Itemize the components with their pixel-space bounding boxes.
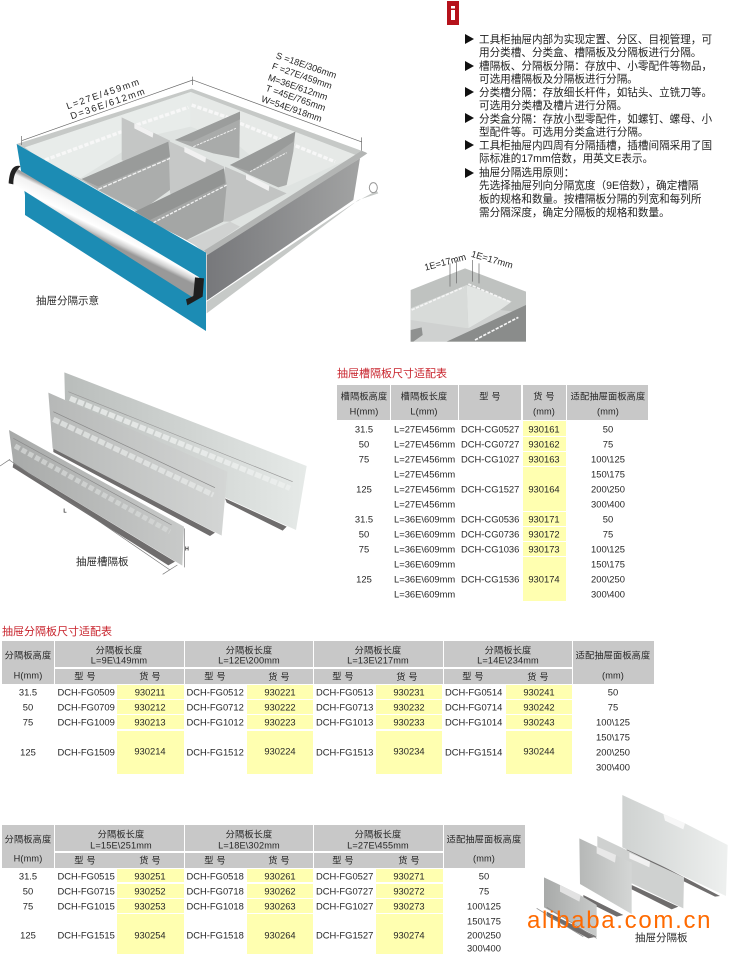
table 2 rows: DCH-FG1512 [186, 746, 244, 758]
table 3 header: 分隔板长度 [98, 828, 144, 840]
aluminium handle [9, 166, 204, 305]
bullet text: 可选用槽隔板及分隔板进行分隔。 [479, 72, 638, 86]
table 2 rows: 150\175 [596, 732, 630, 742]
dimension labels: L=27E/459mm [65, 76, 142, 111]
table 2 rows: 930232 [393, 702, 425, 712]
table 3 rows: 930272 [393, 886, 425, 896]
table 2 rows: 100\125 [596, 716, 630, 728]
table 3 rows: 930263 [264, 900, 296, 912]
table 1 header: 槽隔板高度 [341, 390, 387, 402]
table 2 rows: 930231 [393, 686, 425, 698]
table 2 rows: DCH-FG0713 [316, 702, 373, 712]
table 1 rows: 930174 [528, 574, 560, 584]
table 1 rows: 31.5 [355, 424, 373, 434]
small divider [537, 877, 623, 938]
table 1 rows: 100\125 [591, 454, 625, 464]
table 3 rows: 150\175 [467, 916, 501, 926]
table 2 rows: 300\400 [596, 762, 630, 772]
back partition [64, 372, 307, 531]
table 2 rows: DCH-FG1509 [58, 746, 115, 758]
bullet text: 工具柜抽屉内四周有分隔插槽，插槽间隔采用了国 [479, 139, 712, 152]
table 1 rows: 200\250 [591, 574, 625, 584]
table 2 rows: 930212 [134, 702, 166, 712]
table 3 header: 货 号 [398, 854, 420, 866]
table 3 header: L=15E\251mm [90, 840, 152, 850]
table 2 header: H(mm) [14, 670, 42, 680]
table 1 rows: 300\400 [591, 588, 625, 600]
table 3 header: L=18E\302mm [218, 840, 280, 850]
large divider [622, 795, 728, 897]
table 2 rows: 930233 [393, 716, 425, 728]
table 1 rows: L=36E\609mm [394, 544, 455, 554]
table 3 rows: 930273 [393, 900, 425, 912]
table 3 rows: 50 [23, 886, 33, 896]
table 2 rows: 125 [20, 746, 36, 758]
table 2 rows: DCH-FG1513 [316, 746, 373, 758]
table 1 rows: 50 [603, 514, 613, 524]
watermark: alibaba.com.cn [527, 907, 712, 934]
table 1 rows: DCH-CG0527 [461, 424, 519, 434]
table 2 rows: 50 [23, 702, 33, 712]
table 3 rows [19, 870, 501, 954]
drawer illustration [9, 50, 378, 331]
table 2 rows: DCH-FG0512 [186, 686, 244, 698]
table 2 rows: 930214 [134, 746, 166, 756]
table 3 header: (mm) [473, 854, 495, 864]
dimension labels: D=36E/612mm [69, 86, 147, 121]
table 1 rows: 75 [359, 544, 369, 554]
table 1 header: 槽隔板长度 [401, 390, 447, 402]
table 2 rows: 930234 [393, 746, 425, 756]
table 2 rows: DCH-FG0513 [316, 686, 373, 698]
table 3 rows: DCH-FG0518 [186, 870, 244, 882]
detail: 1E slot spacing: 1E=17mm [470, 249, 514, 270]
table 1 rows: 50 [359, 438, 369, 450]
dimension labels: W=54E/918mm [260, 94, 324, 124]
table 3 rows: 930264 [264, 930, 296, 940]
table 3 rows: DCH-FG1015 [58, 900, 115, 912]
dimension lines [22, 77, 362, 151]
caption: slotted partition: 抽屉槽隔板 [76, 555, 129, 568]
table 3 rows: 930271 [393, 870, 425, 882]
table 1 rows: 150\175 [591, 468, 625, 480]
table 2 header: (mm) [602, 670, 624, 680]
table 1 rows: 930173 [528, 544, 560, 554]
table 2 rows: DCH-FG1012 [186, 716, 244, 728]
table 3 rows: DCH-FG1518 [186, 930, 244, 940]
table 3 rows: DCH-FG1027 [316, 900, 373, 912]
table 2 header: 适配抽屉面板高度 [576, 650, 650, 660]
drawer interior [17, 89, 367, 252]
table 3 rows: DCH-FG1515 [58, 930, 115, 940]
L and H labels: L [63, 509, 67, 515]
table 1 rows [355, 424, 625, 600]
table 2 header: L=13E\217mm [347, 656, 409, 666]
table 1 rows: L=27E\456mm [394, 454, 455, 464]
table 1 rows: 75 [359, 454, 369, 464]
dimension labels: M=36E/612mm [267, 72, 329, 102]
illustration: dividers [537, 795, 728, 938]
middle partition [48, 393, 227, 536]
table 3 rows: 930254 [134, 930, 166, 940]
bullet text: 工具柜抽屉内部为实现定置、分区、目视管理，可 [479, 33, 712, 46]
table 2 header: 分隔板长度 [485, 644, 531, 656]
table 3 rows: 50 [479, 870, 489, 882]
dimension lines [0, 459, 184, 574]
table 1 rows: 50 [603, 424, 613, 434]
table 1 rows: 50 [359, 528, 369, 540]
table 3 rows: 75 [479, 886, 489, 896]
table 1 rows: 930161 [528, 424, 560, 434]
table 1 rows: DCH-CG1527 [461, 484, 519, 494]
table 1 rows: 100\125 [591, 544, 625, 554]
table 2 header: 型 号 [332, 672, 354, 682]
caption: drawer: 抽屉分隔示意 [36, 294, 99, 307]
table 3 rows: 930252 [134, 886, 166, 896]
front partition [9, 430, 184, 566]
table 3 rows: 200\250 [467, 930, 501, 940]
dimension labels [65, 50, 338, 124]
bullet text: 槽隔板、分隔板分隔：存放中、小零配件等物品， [479, 60, 712, 72]
table 2 rows: DCH-FG0712 [186, 702, 244, 712]
dividers [82, 112, 295, 252]
table 2 rows [19, 686, 630, 772]
table 2 rows: 50 [608, 686, 618, 698]
bullet text: 型配件等。可选用分类盒进行分隔。 [479, 126, 648, 138]
table 3 rows: 930251 [134, 870, 166, 882]
table 2 header: L=14E\234mm [477, 656, 539, 666]
bullet text: 分类槽分隔：存放细长杆件，如钻头、立铣刀等。 [479, 86, 712, 99]
table 3 header: 分隔板长度 [226, 828, 272, 840]
table 1 header: 货 号 [533, 390, 555, 402]
table 1 header: H(mm) [350, 406, 378, 416]
dimension labels: T =45E/765mm [264, 83, 327, 113]
bullet text: 用分类槽、分类盒、槽隔板及分隔板进行分隔。 [479, 46, 701, 59]
table 1 rows: 150\175 [591, 558, 625, 570]
table 1 rows: 930163 [528, 454, 560, 464]
table 1 rows: L=36E\609mm [394, 528, 455, 540]
table 3 header: 适配抽屉面板高度 [447, 834, 521, 844]
table 2 highlighted cells [117, 685, 572, 774]
table 1 rows: 930172 [528, 528, 560, 540]
caption: divider: 抽屉分隔板 [635, 931, 688, 944]
bullet markers [465, 34, 474, 178]
bullet text [479, 33, 712, 219]
table 2 rows: DCH-FG0509 [58, 686, 115, 698]
bullet text: 板的规格和数量。按槽隔板分隔的列宽和每列所 [479, 192, 702, 206]
table 3 header: H(mm) [14, 854, 42, 864]
table 1 header: 适配抽屉面板高度 [571, 390, 645, 402]
table 1 rows: L=36E\609mm [394, 574, 455, 584]
table 1 highlighted cells [523, 421, 566, 601]
detail: 1E slot spacing: 1E=17mm [423, 252, 467, 273]
table 1 header: (mm) [597, 406, 619, 416]
table 1 rows: DCH-CG0727 [461, 438, 519, 450]
table 2 rows: 930223 [264, 716, 296, 728]
table 1 rows: 125 [356, 574, 372, 584]
table 3 header: 型 号 [74, 856, 96, 866]
table 3 rows: 100\125 [467, 900, 501, 912]
table 2 header: 分隔板长度 [226, 644, 272, 656]
table 2 header: L=9E\149mm [91, 656, 147, 666]
L and H labels: H [185, 546, 189, 552]
detail: 1E slot spacing [411, 249, 526, 342]
table 2: divider sizes [2, 641, 654, 774]
table 1 rows: L=36E\609mm [394, 588, 455, 600]
table 2 header: 型 号 [74, 672, 96, 682]
table 1 rows: 75 [603, 528, 613, 540]
bullet text: 分类盒分隔：存放小型零配件，如螺钉、螺母、小 [479, 112, 712, 126]
table 2 rows: DCH-FG1009 [58, 716, 115, 728]
table 1 rows: L=36E\609mm [394, 514, 455, 524]
bullet text: 可选用分类槽及槽片进行分隔。 [479, 99, 627, 112]
table 1 header: 型 号 [479, 392, 501, 402]
table 1 rows: DCH-CG1036 [461, 544, 519, 554]
table 2 rows: 930242 [523, 702, 555, 712]
table 3 rows: DCH-FG0515 [58, 870, 115, 882]
bullet text: 抽屉分隔选用原则： [479, 166, 574, 179]
table 2 rows: 930244 [523, 746, 555, 756]
table 2 header: 型 号 [462, 672, 484, 682]
table 3 rows: DCH-FG0527 [316, 870, 373, 882]
table 3 rows: DCH-FG1527 [316, 930, 373, 940]
table 1 rows: DCH-CG1027 [461, 454, 519, 464]
table 2 header: 分隔板高度 [5, 650, 51, 660]
table 2 rows: 930224 [264, 746, 296, 756]
drawer right side and rail [204, 151, 378, 313]
table 2 rows: 930222 [264, 702, 296, 712]
table 2 rows: DCH-FG0709 [58, 702, 115, 712]
table 3 header: 货 号 [139, 854, 161, 866]
table 1 rows: 930164 [528, 484, 560, 494]
table 3 rows: 930274 [393, 930, 425, 940]
icon: info [447, 1, 459, 25]
dimension labels: S =18E/306mm [275, 50, 338, 81]
table 3 header: 分隔板高度 [5, 834, 51, 844]
table 2 title: 抽屉分隔板尺寸适配表 [2, 624, 112, 638]
table 2 header: 分隔板长度 [96, 644, 142, 656]
table 1 rows: L=36E\609mm [394, 558, 455, 570]
table 1 rows: 930171 [528, 514, 560, 524]
table 2 rows: 930211 [135, 686, 165, 698]
table 1 rows: 300\400 [591, 498, 625, 510]
table 2 rows: 200\250 [596, 746, 630, 758]
illustration: slotted partitions [0, 372, 307, 574]
L and H labels [63, 509, 189, 552]
table 3 rows: 125 [20, 930, 36, 940]
table 2 header: 货 号 [268, 671, 290, 682]
bullet text: 需分隔深度，确定分隔板的规格和数量。 [479, 206, 670, 219]
table 3 header: 货 号 [268, 854, 290, 866]
table 2 header [2, 641, 654, 684]
table 1 rows: 200\250 [591, 484, 625, 494]
table 2 rows: DCH-FG1514 [445, 746, 502, 758]
table 3 header: 型 号 [332, 856, 354, 866]
table 1 rows: 930162 [528, 438, 560, 450]
medium divider [579, 836, 684, 914]
table 1 rows: DCH-CG1536 [461, 574, 519, 584]
table 1 rows: DCH-CG0736 [461, 528, 519, 540]
table 2 rows: DCH-FG1013 [316, 716, 373, 728]
table 3 header: L=27E\455mm [347, 840, 409, 850]
table 1 rows: L=27E\456mm [394, 484, 455, 494]
table 2 header: L=12E\200mm [218, 656, 280, 666]
bullet list [465, 33, 712, 219]
table 3: divider sizes continued [2, 825, 525, 954]
table 2 rows: 930221 [264, 686, 296, 698]
table 1 title: 抽屉槽隔板尺寸适配表 [337, 366, 447, 380]
table 3 rows: DCH-FG0727 [316, 886, 373, 896]
blue drawer front [17, 144, 206, 331]
table 3 header: 分隔板长度 [355, 828, 401, 840]
table 3 rows: 930253 [134, 900, 166, 912]
table 1 rows: 31.5 [355, 514, 373, 524]
table 2 header: 货 号 [527, 671, 549, 682]
table 1 rows: 125 [356, 484, 372, 494]
table 3 highlighted cells [117, 869, 443, 954]
table 1 rows: DCH-CG0536 [461, 514, 519, 524]
bullet text: 际标准的17mm倍数，用英文E表示。 [479, 152, 653, 165]
table 3 rows: 31.5 [19, 870, 37, 882]
table 3 rows: DCH-FG0718 [186, 886, 244, 896]
table 1 header [337, 385, 648, 420]
table 3 rows: DCH-FG0715 [58, 886, 115, 896]
table 3 rows: 75 [23, 900, 33, 912]
bullet text: 先选择抽屉列向分隔宽度（9E倍数），确定槽隔 [479, 179, 699, 192]
table 2 rows: 930243 [523, 716, 555, 728]
table 2 rows: 31.5 [19, 686, 37, 698]
table 3 header: 型 号 [204, 856, 226, 866]
table 1 header: L(mm) [410, 406, 438, 416]
table 2 rows: DCH-FG1014 [445, 716, 502, 728]
table 1 rows: L=27E\456mm [394, 468, 455, 480]
table 2 header: 货 号 [139, 670, 161, 682]
table 2 rows: 75 [23, 716, 33, 728]
table 2 rows: DCH-FG0514 [445, 686, 502, 698]
dimension labels: F =27E/459mm [271, 61, 334, 91]
table 3 rows: DCH-FG1018 [186, 900, 244, 912]
table 2 rows: DCH-FG0714 [445, 702, 502, 712]
table 2 rows: 930213 [134, 716, 166, 728]
table 3 rows: 930262 [264, 886, 296, 896]
table 1 rows: L=27E\456mm [394, 438, 455, 450]
table 2 header: 分隔板长度 [355, 644, 401, 656]
table 3 rows: 300\400 [467, 942, 501, 954]
table 1 rows: 75 [603, 438, 613, 450]
table 2 header: 型 号 [204, 672, 226, 682]
table 1 rows: L=27E\456mm [394, 498, 455, 510]
table 1 header: (mm) [533, 406, 555, 416]
table 3 header [2, 825, 525, 868]
table 2 rows: 75 [608, 702, 618, 712]
table 3 rows: 930261 [264, 870, 296, 882]
table 2 rows: 930241 [523, 686, 555, 698]
table 1: slotted partition sizes [337, 385, 648, 601]
table 1 rows: L=27E\456mm [394, 424, 455, 434]
table 2 header: 货 号 [396, 671, 418, 682]
